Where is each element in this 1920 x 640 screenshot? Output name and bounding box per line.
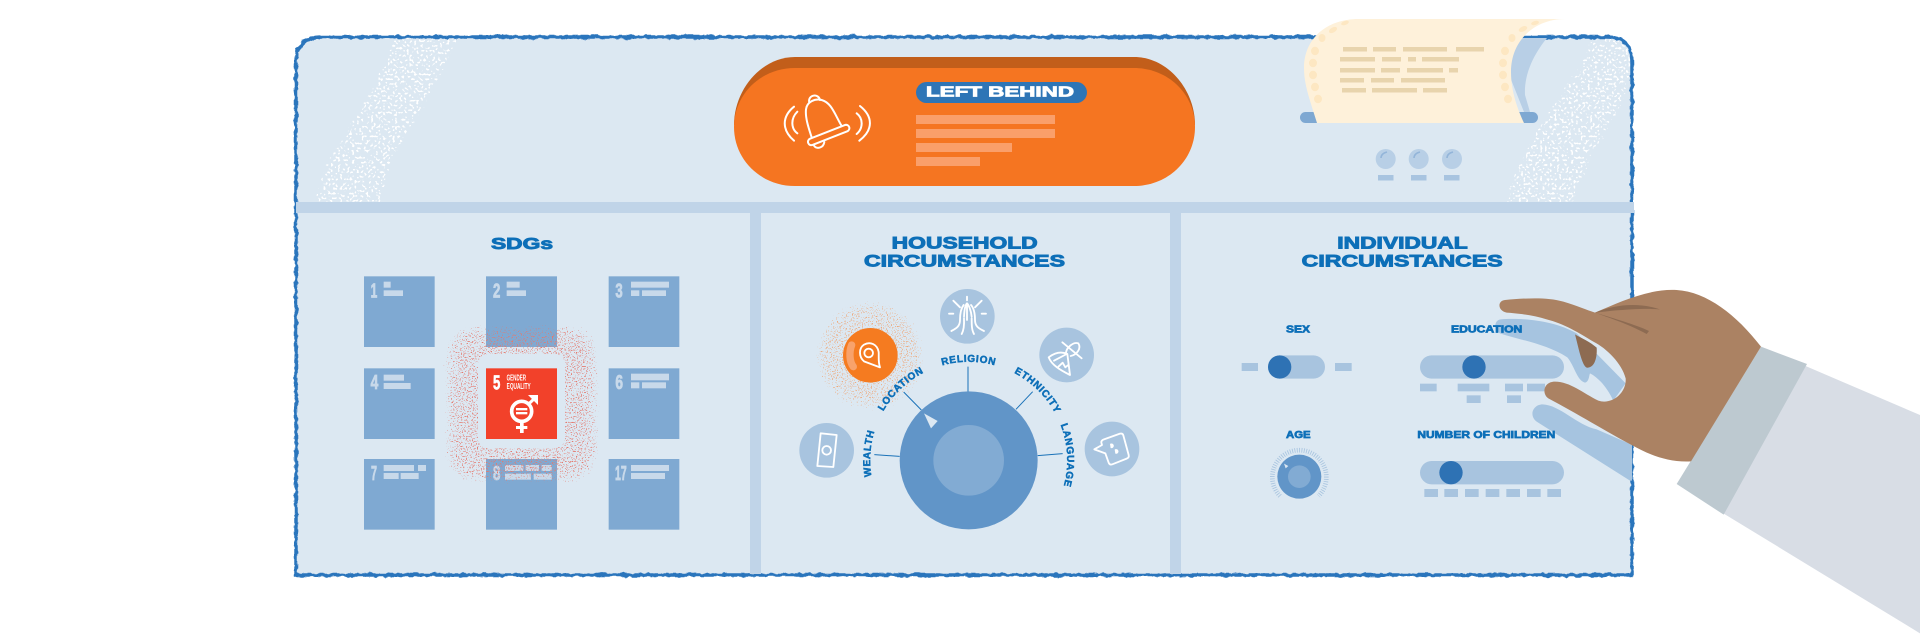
- heading: individual circumstances: CIRCUMSTANCES: [1302, 253, 1503, 271]
- tile 1: [364, 276, 435, 347]
- control: sex: SEX: [1286, 324, 1311, 335]
- tile 3: 3: [615, 280, 623, 302]
- tile 5: gender equality: GENDER: [507, 373, 526, 383]
- label: left behind: [916, 82, 1087, 103]
- control: number of children: [1417, 430, 1564, 497]
- dial ticks: [874, 367, 1063, 456]
- panel border: [296, 37, 1632, 575]
- tile 4: 4: [371, 372, 378, 394]
- printer buttons: [1376, 149, 1462, 180]
- icon: language: [1085, 422, 1139, 476]
- household dial: [900, 391, 1038, 529]
- hand shadow: [1495, 319, 1633, 481]
- icon: gender equality symbol: [512, 395, 538, 433]
- tile 7: 7: [371, 463, 377, 485]
- panel: SDGs: [364, 236, 679, 530]
- tile 17: [609, 459, 679, 530]
- panel: dashboard background: [296, 37, 1632, 575]
- heading: individual circumstances: [1302, 235, 1503, 271]
- vertical divider one: [750, 213, 761, 574]
- tile 8: [486, 459, 557, 530]
- tile 3: [609, 276, 679, 347]
- hand and sleeve: [1499, 290, 1920, 633]
- icon: wealth: [799, 423, 854, 478]
- icon: location: [843, 328, 898, 383]
- tile 6: [609, 368, 679, 439]
- tile 4: [364, 368, 435, 439]
- paper perforations: [1309, 20, 1539, 103]
- tile 5: gender equality: [486, 368, 557, 439]
- horizontal divider: [296, 202, 1634, 213]
- printer slot: [1300, 112, 1538, 123]
- heading: SDGs: SDGs: [491, 236, 553, 253]
- placeholder text bars: [916, 115, 1055, 166]
- panel: household circumstances: [799, 235, 1140, 530]
- control: education: EDUCATION: [1451, 324, 1522, 335]
- speckle around goal 5: [436, 316, 608, 492]
- dial labels: ETHNICITY: [1014, 366, 1062, 412]
- cuff: [1677, 347, 1807, 515]
- dial and icons: [799, 289, 1139, 529]
- control: age dial: [1272, 430, 1326, 499]
- heading: household circumstances: [864, 235, 1065, 271]
- tile 5: gender equality: EQUALITY: [507, 381, 531, 391]
- tile 8: 8: [493, 463, 500, 485]
- speckle band right: [1508, 38, 1630, 202]
- icon: ringing bell: [785, 96, 870, 148]
- control: education: [1420, 324, 1564, 403]
- tile 2: 2: [493, 280, 500, 302]
- icon: ethnicity: [1039, 328, 1094, 382]
- heading: individual circumstances: INDIVIDUAL: [1337, 235, 1468, 253]
- tile 1: 1: [371, 280, 377, 302]
- heading: household circumstances: HOUSEHOLD: [892, 235, 1038, 253]
- panel: individual circumstances: [1242, 235, 1564, 499]
- tile 6: 6: [615, 372, 623, 394]
- paper curl shadow: [1508, 38, 1547, 112]
- tile 17: 17: [615, 463, 627, 485]
- dial labels: LOCATION: [877, 366, 924, 412]
- paper: [1304, 19, 1565, 123]
- tile 2: [486, 276, 557, 347]
- vertical divider two: [1170, 213, 1181, 574]
- dial labels: [863, 354, 1074, 487]
- speckle around location: [809, 294, 931, 416]
- finger shadow: [1575, 334, 1597, 368]
- dial labels: RELIGION: [940, 354, 996, 366]
- clear zone around goal 5: [478, 354, 565, 448]
- SDG tiles: [364, 276, 679, 530]
- dial labels: WEALTH: [863, 430, 874, 478]
- pill shadow: [734, 57, 1195, 125]
- label: left behind: LEFT BEHIND: [926, 84, 1074, 101]
- hand: [1499, 290, 1761, 461]
- heading: household circumstances: CIRCUMSTANCES: [864, 253, 1065, 271]
- alert pill: left behind: [734, 57, 1195, 186]
- tile 5: gender equality: 5: [493, 372, 500, 394]
- dial labels: LANGUAGE: [1060, 422, 1074, 487]
- icon: religion: [940, 289, 995, 344]
- pill body: [734, 68, 1195, 186]
- sleeve: [1722, 364, 1920, 633]
- tile 7: [364, 459, 435, 530]
- paper text lines: [1340, 47, 1484, 92]
- control: age dial: AGE: [1286, 430, 1311, 441]
- control: sex: [1242, 324, 1352, 379]
- printer with paper: [1300, 19, 1565, 180]
- control: number of children: NUMBER OF CHILDREN: [1417, 430, 1555, 441]
- knuckle creases: [1595, 305, 1660, 334]
- speckle band left: [316, 38, 456, 202]
